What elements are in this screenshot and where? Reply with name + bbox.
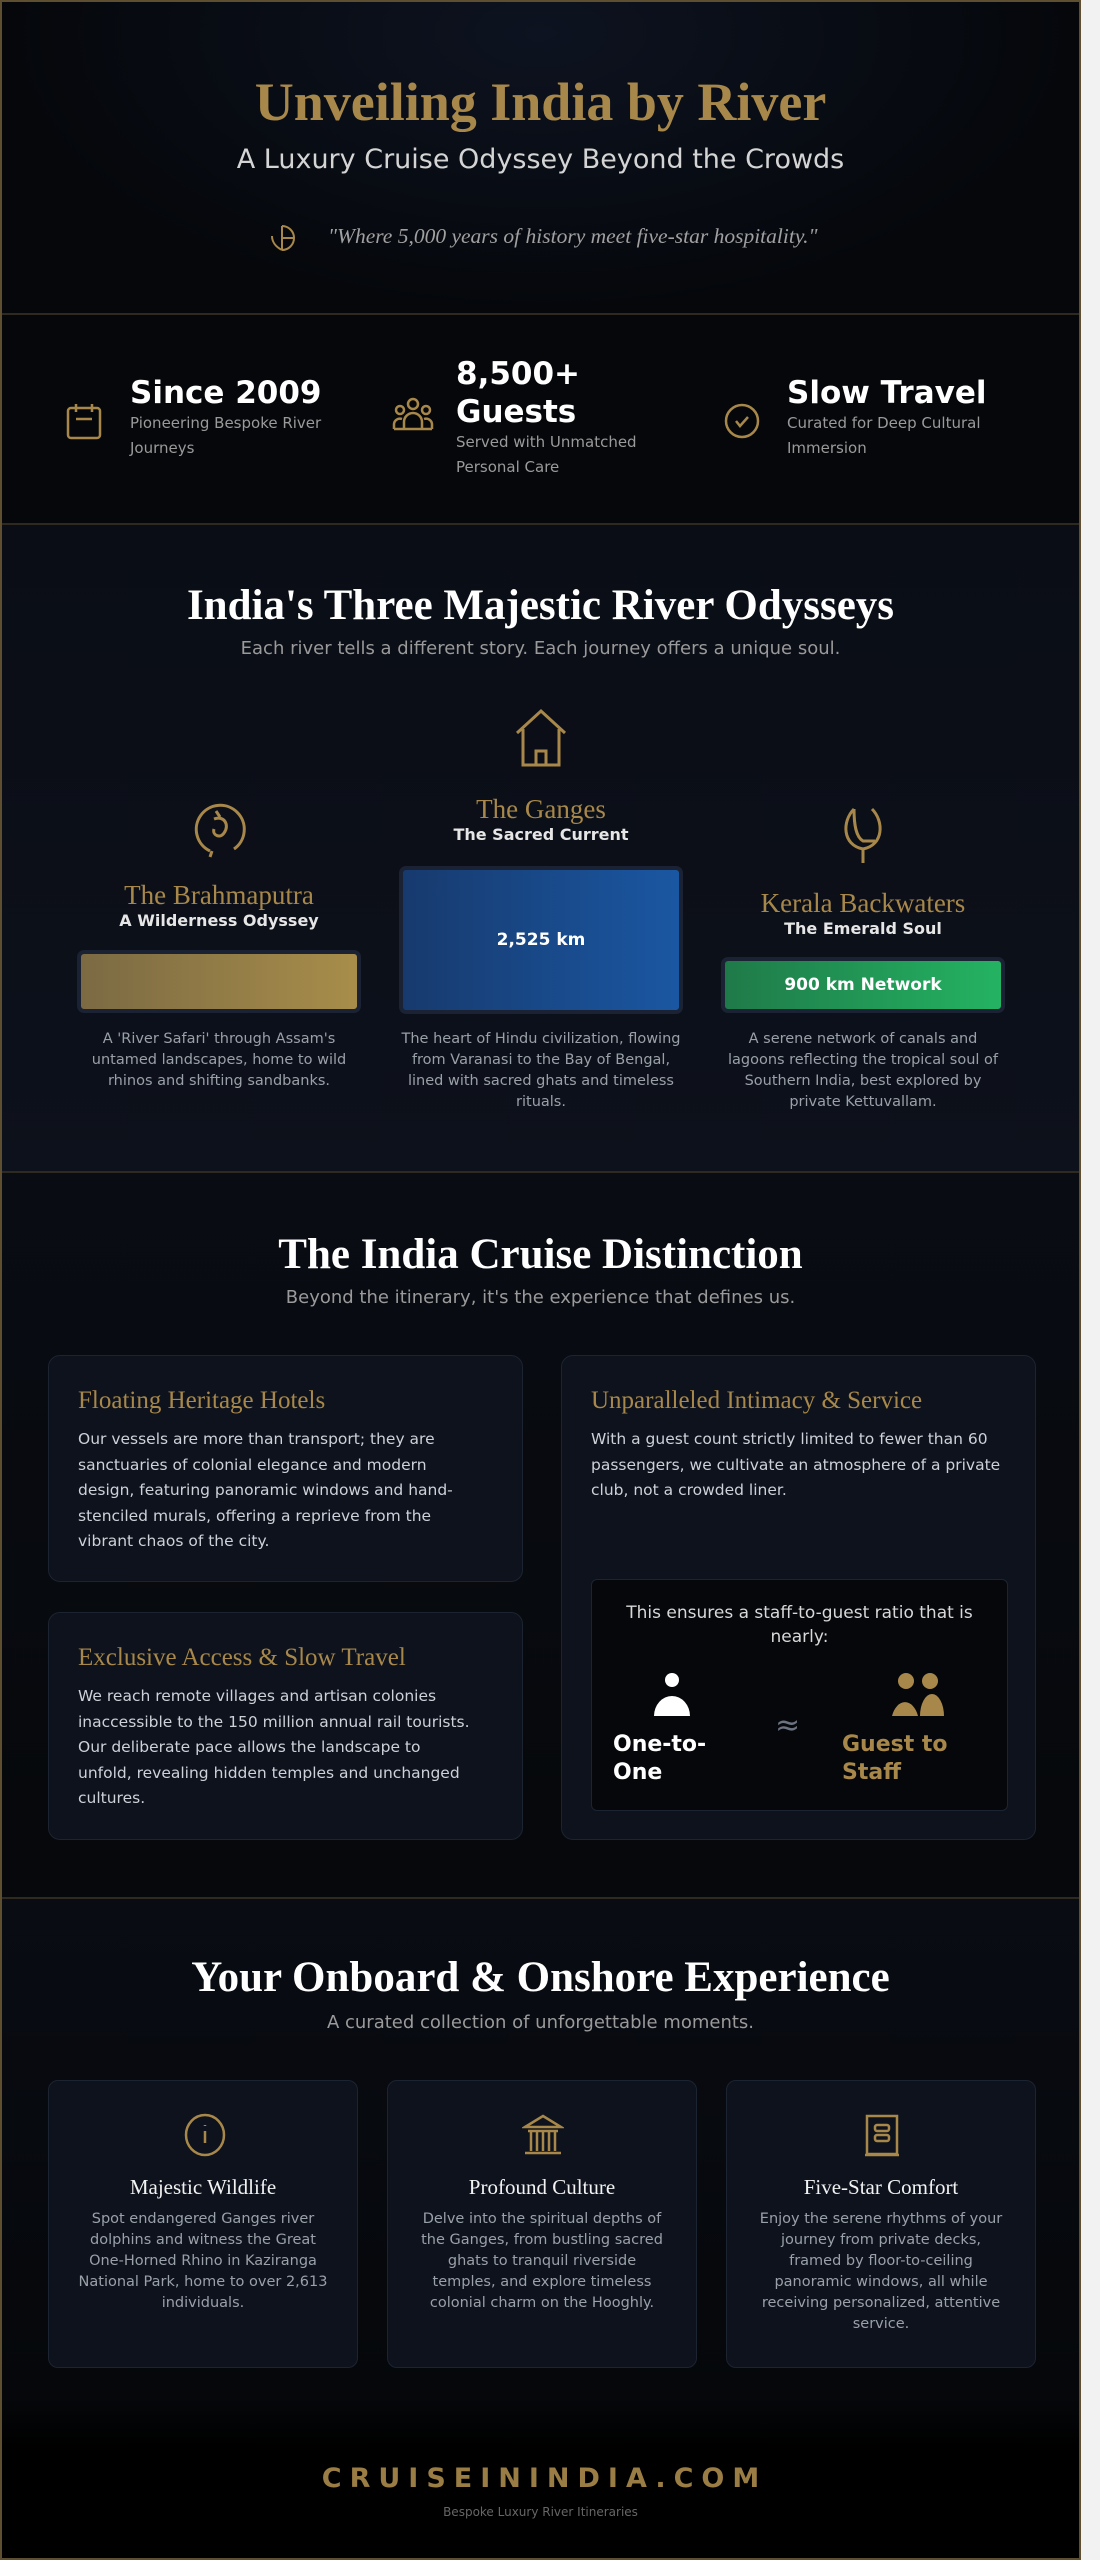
bar: ganges 2,525 km: 2,525 km	[497, 930, 585, 950]
heading: Your Onboard & Onshore Experience	[191, 1954, 890, 2001]
panel: experience	[2, 1899, 1079, 2399]
icon: single person	[654, 1673, 690, 1716]
column: ganges	[399, 709, 683, 1110]
icon: calendar	[66, 404, 102, 440]
card: wildlife	[48, 2080, 358, 2368]
card: wildlife: Spot endangered Ganges river dolphins and witness the Great One-Horned Rhino in Kaziranga National Park, home to over 2,613 individuals.	[79, 2211, 327, 2311]
column: ganges: The Sacred Current	[453, 825, 629, 844]
heading: India's Three Majestic River Odysseys	[187, 582, 894, 629]
card: culture	[387, 2080, 697, 2368]
panel: rivers	[2, 525, 1079, 1172]
card: intimacy & service	[561, 1355, 1036, 1840]
card: floating heritage hotels: Our vessels are more than transport; they are sanctuaries of colonial elegance and modern design, featuring panoramic windows and hand-stenciled murals, offering a reprieve from the vibrant chaos of the city.	[78, 1430, 453, 1550]
column: brahmaputra: A 'River Safari' through Assam's untamed landscapes, home to wild rhinos and shifting sandbanks.	[92, 1031, 346, 1089]
card: culture: Delve into the spiritual depths of the Ganges, from bustling sacred ghats to tranquil riverside temples, and explore timeless colonial charm on the Hooghly.	[421, 2211, 663, 2311]
stats row	[2, 315, 1079, 524]
icon: compass	[194, 804, 246, 858]
subheading: Beyond the itinerary, it's the experience that defines us.	[286, 1287, 795, 1308]
callout: staff ratio	[591, 1579, 1008, 1811]
stat: since 2009	[66, 375, 322, 457]
icon: lotus	[271, 225, 295, 251]
quote	[271, 224, 818, 251]
quote text: "Where 5,000 years of history meet five-star hospitality."	[328, 224, 818, 248]
title: Unveiling India by River	[255, 72, 826, 132]
card: exclusive access: Exclusive Access & Slow Travel	[78, 1644, 406, 1671]
icon: people	[392, 398, 434, 430]
icon: check circle	[724, 404, 760, 438]
column: brahmaputra: A Wilderness Odyssey	[119, 911, 319, 930]
callout: staff ratio: Guest to Staff	[842, 1732, 948, 1785]
card: floating heritage hotels	[48, 1355, 523, 1582]
approx symbol: ≈	[775, 1708, 800, 1743]
bar: ganges 2,525 km	[399, 866, 683, 1014]
stat: guests	[392, 356, 637, 476]
column: kerala: The Emerald Soul	[784, 919, 942, 938]
icon: two people	[892, 1673, 944, 1716]
brand: CRUISEININDIA.COM	[322, 2463, 767, 2494]
icon: info	[184, 2114, 226, 2156]
bar: kerala 900 km: 900 km Network	[784, 975, 942, 995]
subheading: Each river tells a different story. Each journey offers a unique soul.	[241, 638, 840, 659]
card: wildlife: Majestic Wildlife	[130, 2175, 276, 2199]
panel: distinction	[2, 1173, 1079, 1897]
icon: temple	[522, 2114, 564, 2154]
column: kerala: A serene network of canals and lagoons reflecting the tropical soul of Southern India, best explored by private Kettuvallam.	[728, 1031, 998, 1110]
stat: slow travel: Slow Travel	[787, 375, 986, 411]
stat: guests: Served with Unmatched Personal Care	[456, 433, 637, 476]
column: kerala	[721, 808, 1005, 1110]
icon: house	[516, 709, 566, 766]
bar: brahmaputra	[77, 950, 361, 1013]
column: kerala: Kerala Backwaters	[761, 888, 965, 918]
card: floating heritage hotels: Floating Heritage Hotels	[78, 1387, 325, 1414]
icon: leaf	[844, 808, 882, 863]
heading: The India Cruise Distinction	[278, 1231, 803, 1278]
subtitle: A Luxury Cruise Odyssey Beyond the Crowds	[237, 144, 844, 175]
card: exclusive access: We reach remote villages and artisan colonies inaccessible to the 150 million annual rail tourists. Our deliberate pace allows the landscape to unfold, revealing hidden temples and unchanged cultures.	[78, 1687, 470, 1807]
stat: since 2009: Pioneering Bespoke River Journeys	[130, 414, 321, 457]
stat: guests: 8,500+ Guests	[456, 356, 580, 430]
card: intimacy & service: With a guest count strictly limited to fewer than 60 passengers, we cultivate an atmosphere of a private club, not a crowded liner.	[591, 1430, 1000, 1499]
column: brahmaputra: The Brahmaputra	[124, 880, 314, 910]
footer	[2, 2399, 1079, 2560]
column: brahmaputra	[77, 804, 361, 1089]
card: comfort: Five-Star Comfort	[804, 2175, 958, 2199]
stat: slow travel: Curated for Deep Cultural Immersion	[787, 414, 980, 457]
tagline: Bespoke Luxury River Itineraries	[443, 2505, 638, 2519]
card: exclusive access	[48, 1612, 523, 1840]
callout: staff ratio: One-to-One	[613, 1732, 706, 1785]
icon: cabinet	[865, 2114, 899, 2156]
card: comfort	[726, 2080, 1036, 2368]
card: culture: Profound Culture	[469, 2175, 615, 2199]
callout: staff ratio: This ensures a staff-to-guest ratio that is nearly:	[626, 1603, 973, 1647]
column: ganges: The Ganges	[476, 794, 606, 824]
bar: kerala 900 km	[721, 957, 1005, 1013]
stat: since 2009: Since 2009	[130, 375, 322, 411]
header section	[2, 2, 1079, 313]
column: ganges: The heart of Hindu civilization, flowing from Varanasi to the Bay of Bengal, lined with sacred ghats and timeless rituals.	[402, 1031, 680, 1110]
card: intimacy & service: Unparalleled Intimacy & Service	[591, 1387, 922, 1414]
stat: slow travel	[724, 375, 986, 457]
card: comfort: Enjoy the serene rhythms of your journey from private decks, framed by floor-to-ceiling panoramic windows, all while receiving personalized, attentive service.	[760, 2211, 1002, 2332]
subheading: A curated collection of unforgettable moments.	[327, 2012, 754, 2033]
